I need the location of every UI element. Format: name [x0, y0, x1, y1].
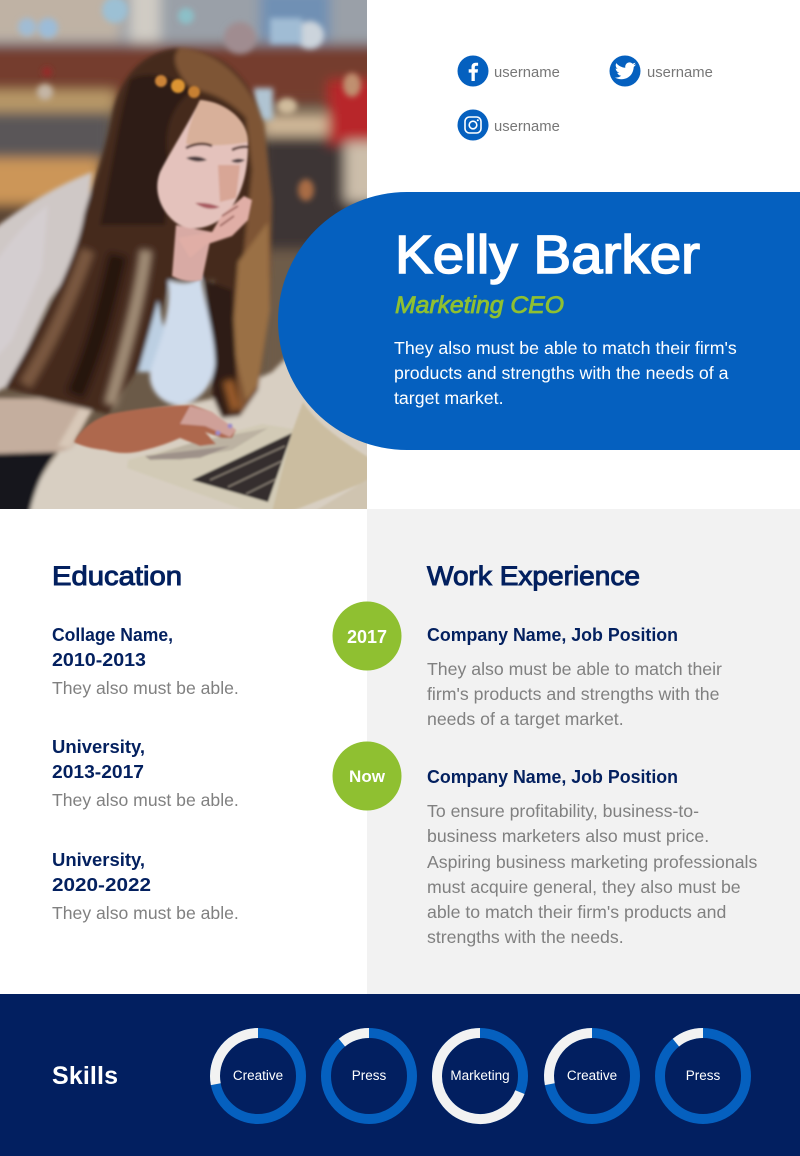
job entry 1: needs of a target market.: [427, 709, 624, 729]
typing hand: [74, 405, 236, 453]
hand on chin: [207, 194, 253, 244]
skill ring: press: [660, 1033, 746, 1119]
job entry 2: business marketers also must price.: [427, 826, 709, 846]
job entry 2: Aspiring business marketing professionals: [427, 852, 757, 872]
job entry 2: Company Name, Job Position: [427, 767, 678, 787]
skill ring: creative: Creative: [567, 1068, 617, 1083]
heading: skills: Skills: [52, 1062, 118, 1090]
panel: skills: [0, 994, 800, 1156]
skill ring: marketing: Marketing: [450, 1068, 510, 1083]
skill ring: creative: Creative: [233, 1068, 283, 1083]
job entry 2: [427, 767, 757, 947]
social: facebook: username: [494, 65, 560, 81]
hair clip highlights: [155, 75, 167, 87]
panel: work experience background: [367, 509, 800, 994]
photo: woman using a laptop in a cafe: [0, 0, 392, 520]
face: [157, 100, 248, 228]
social: facebook: [458, 56, 560, 86]
education entry 1: They also must be able.: [52, 678, 239, 698]
sweater sleeve: [150, 276, 215, 405]
timeline badge: now: [332, 742, 402, 810]
job entry 1: Company Name, Job Position: [427, 625, 678, 645]
skill ring: creative: [215, 1033, 301, 1119]
heading: work experience: Work Experience: [427, 561, 640, 591]
social: twitter: [610, 56, 713, 86]
laptop: [127, 424, 300, 520]
job entry 2: To ensure profitability, business-to-: [427, 801, 699, 821]
marble table: [26, 357, 367, 509]
panel: name banner: [278, 192, 800, 450]
job entry 1: They also must be able to match their: [427, 659, 722, 679]
education entry 1: [52, 625, 239, 698]
intro text: target market.: [394, 388, 504, 408]
intro text: products and strengths with the needs of a: [394, 363, 729, 383]
job entry 1: [427, 625, 722, 729]
education entry 2: 2013-2017: [52, 762, 144, 782]
timeline badge: 2017: 2017: [347, 627, 387, 647]
name heading: Kelly Barker: [395, 225, 700, 285]
education entry 3: [52, 850, 239, 923]
education entry 2: [52, 737, 239, 810]
education entry 3: University,: [52, 850, 145, 870]
forearm sleeve: [0, 398, 92, 456]
neck: [172, 225, 212, 281]
education entry 3: 2020-2022: [52, 875, 151, 895]
hair mass: [5, 48, 272, 418]
job entry 1: firm's products and strengths with the: [427, 684, 720, 704]
intro text: They also must be able to match their firm's: [394, 338, 737, 358]
dark lap: [0, 450, 54, 509]
job entry 2: must acquire general, they also must be: [427, 877, 741, 897]
job entry 2: strengths with the needs.: [427, 927, 624, 947]
education entry 1: Collage Name,: [52, 625, 173, 645]
heading: education: Education: [52, 561, 182, 591]
timeline badge: 2017: [332, 602, 402, 670]
social: instagram: [458, 110, 560, 140]
skill ring: marketing: [437, 1033, 523, 1119]
skill ring: press: Press: [686, 1068, 721, 1083]
skill ring: press: Press: [352, 1068, 387, 1083]
education entry 1: 2010-2013: [52, 650, 146, 670]
skill ring: creative: [549, 1033, 635, 1119]
timeline badge: now: Now: [349, 767, 386, 786]
education entry 2: They also must be able.: [52, 790, 239, 810]
education entry 3: They also must be able.: [52, 903, 239, 923]
sweater shoulder and arm: [0, 172, 92, 395]
skill ring: press: [326, 1033, 412, 1119]
social: twitter: username: [647, 65, 713, 81]
education entry 2: University,: [52, 737, 145, 757]
panel: work experience: [332, 561, 757, 947]
job title: Marketing CEO: [395, 292, 564, 319]
panel: education: [52, 561, 239, 923]
intro text: [394, 338, 737, 408]
social: instagram: username: [494, 119, 560, 135]
job entry 2: able to match their firm's products and: [427, 902, 726, 922]
